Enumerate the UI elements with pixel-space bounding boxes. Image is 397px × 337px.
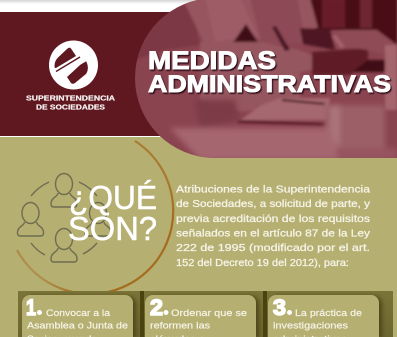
card 2 text: Ordenar que se <box>171 308 247 319</box>
text block: description: Atribuciones de la Superintendencia <box>176 184 370 196</box>
sleeve <box>182 0 318 45</box>
text block: description: señalados en el artículo 87 de la Ley <box>176 228 371 240</box>
number 3: 3 <box>273 295 286 320</box>
panel: cards section <box>18 291 393 337</box>
text block: description: de Sociedades, a solicitud de parte, y <box>176 198 371 210</box>
logo text: DE SOCIEDADES <box>36 102 105 112</box>
dark gap <box>232 24 258 44</box>
bullet dot <box>164 310 168 315</box>
card 3 text: investigaciones <box>273 320 348 332</box>
card 3 <box>268 295 379 337</box>
dashed ring <box>31 182 97 255</box>
panel: maroon header <box>0 12 220 136</box>
title: Medidas Administrativas: ADMINISTRATIVAS <box>148 71 391 98</box>
person bottom <box>51 228 77 262</box>
text block: description: previa acreditación de los requisitos <box>176 213 370 225</box>
card 1 text <box>27 308 128 337</box>
bullet dot <box>37 310 42 315</box>
icon: logo mark <box>49 40 98 90</box>
band behind cards <box>18 291 393 337</box>
heading: ¿Qué son? <box>68 179 157 247</box>
logo text <box>26 94 116 112</box>
dark top right <box>310 0 397 45</box>
title: Medidas Administrativas <box>148 47 391 98</box>
card 2 <box>145 295 256 337</box>
text block: description: 152 del Decreto 19 del 2012), para: <box>176 257 349 269</box>
number 2: 2 <box>150 295 163 320</box>
card 1 text: Asamblea o Junta de <box>27 320 128 332</box>
text block: description <box>176 184 371 269</box>
shaded left <box>138 4 199 58</box>
icon: circular arc <box>17 141 173 294</box>
bullet dot <box>287 310 292 315</box>
text block: description: 222 de 1995 (modificado por el art. <box>176 242 370 254</box>
number 1: 1 <box>26 295 36 320</box>
card 3 text: La práctica de <box>295 308 362 319</box>
person top <box>51 174 77 207</box>
card 1 <box>22 295 133 337</box>
person right <box>85 202 111 236</box>
hand left <box>200 42 318 112</box>
heading: ¿Qué son?: SON? <box>68 210 157 247</box>
logo text: SUPERINTENDENCIA <box>26 94 116 102</box>
person left <box>18 202 44 236</box>
card 2 text <box>150 308 247 337</box>
card 3 text <box>273 308 362 337</box>
header divider <box>0 136 160 137</box>
icon: group of people <box>18 174 111 262</box>
heading: ¿Qué son?: ¿QUÉ <box>69 179 157 216</box>
blurred foreground <box>195 100 240 128</box>
card 1 text: Convocar a la <box>46 308 111 319</box>
hand right <box>312 48 368 75</box>
panel: header photo <box>130 0 397 160</box>
paper <box>240 98 330 120</box>
card 2 text: reformen las <box>150 320 210 332</box>
logo: Superintendencia de Sociedades <box>26 40 116 112</box>
title: Medidas Administrativas: MEDIDAS <box>148 47 276 75</box>
top white strip <box>0 0 397 12</box>
